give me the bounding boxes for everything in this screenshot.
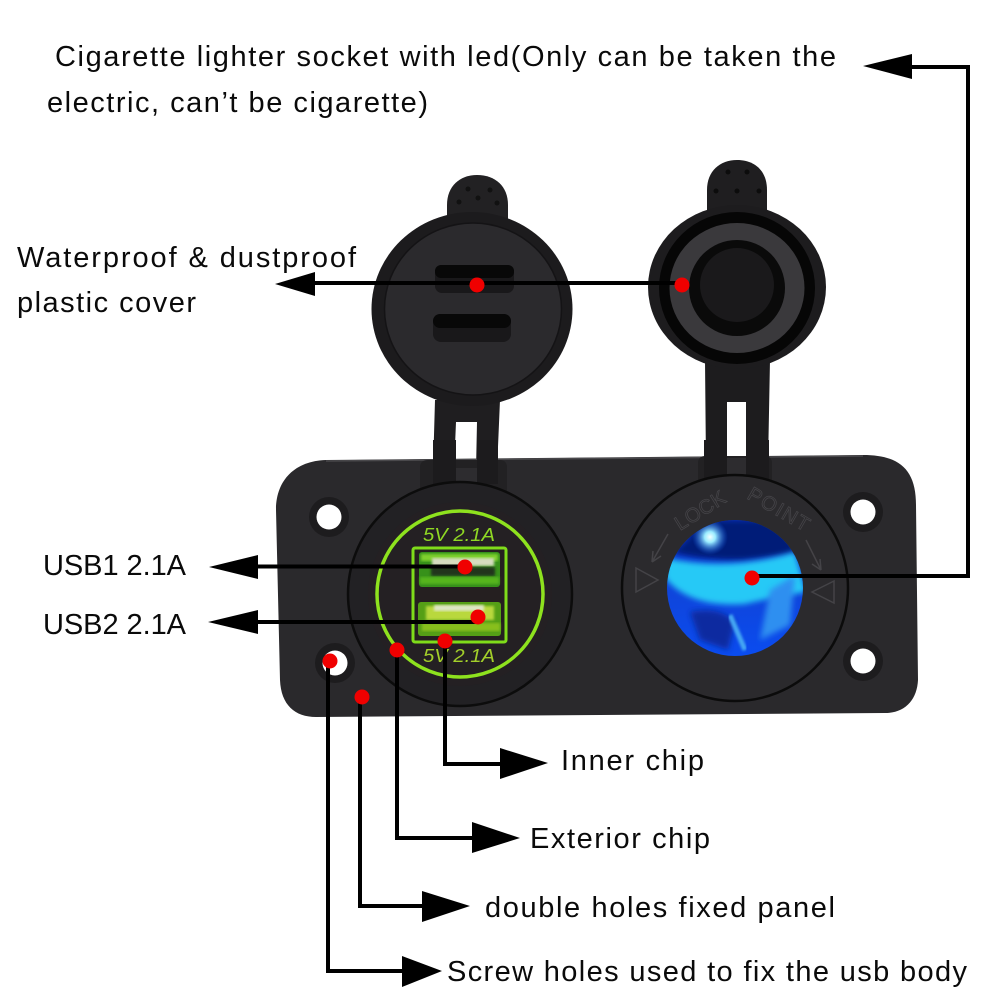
arrow: USB2 xyxy=(208,610,478,634)
arrow: screw holes xyxy=(328,661,442,987)
arrow: USB1 xyxy=(209,555,465,579)
callout: cigarette lighter socket label: Cigarette lighter socket with led(Only can be taken the xyxy=(55,41,836,73)
callout: USB1 label: USB1 2.1A xyxy=(43,550,187,582)
device: left USB protective cover xyxy=(372,175,572,470)
screw hole top right xyxy=(843,492,883,532)
screw hole bottom left xyxy=(315,643,355,683)
cover tab xyxy=(447,175,508,228)
USB port 2 xyxy=(418,602,501,636)
callout: inner chip label: Inner chip xyxy=(561,745,704,777)
USB port 1 xyxy=(419,552,500,587)
lit blue socket interior xyxy=(665,518,806,658)
callout: cigarette lighter socket label xyxy=(47,41,836,119)
embossed LOCK POINT text: LOCK xyxy=(671,487,731,535)
device: cigarette lighter socket xyxy=(622,475,848,701)
red marker dots xyxy=(322,278,760,704)
callout: waterproof cover label xyxy=(17,242,357,319)
arrow: cigarette socket callout xyxy=(752,54,968,576)
cover body xyxy=(372,212,572,406)
green LED ring xyxy=(377,511,543,677)
callout: double holes label: double holes fixed panel xyxy=(485,892,835,924)
cover strap xyxy=(433,400,500,470)
socket cover strap xyxy=(705,360,770,465)
USB port frame xyxy=(413,548,506,642)
device: USB charger socket xyxy=(348,482,572,706)
arrow: inner chip xyxy=(445,641,548,779)
embossed LOCK POINT text xyxy=(671,483,813,536)
callout: cigarette lighter socket label: electric, can’t be cigarette) xyxy=(47,87,428,119)
callout: USB2 label: USB2 2.1A xyxy=(43,609,187,641)
socket cover tab xyxy=(707,160,767,215)
screw hole top left xyxy=(309,497,349,537)
embossed LOCK POINT text: POINT xyxy=(744,483,813,536)
arrow: exterior chip xyxy=(397,650,520,853)
socket cover gray ring xyxy=(670,223,804,353)
strap anchors on panel xyxy=(420,460,507,496)
callout: waterproof cover label: Waterproof & dustproof xyxy=(17,242,357,274)
arrow: waterproof cover xyxy=(275,272,682,296)
screw hole bottom right xyxy=(843,641,883,681)
callout: exterior chip label: Exterior chip xyxy=(530,823,710,855)
voltage label top: 5V 2.1A xyxy=(423,525,495,545)
cover inner disc xyxy=(384,223,562,395)
voltage label bottom: 5V 2.1A xyxy=(423,646,495,666)
arrow: double holes xyxy=(360,697,470,922)
cover slots xyxy=(433,265,514,342)
device: mounting panel xyxy=(276,440,918,717)
socket cover body xyxy=(648,205,826,369)
callout: waterproof cover label: plastic cover xyxy=(17,287,196,319)
embossed triangles xyxy=(636,534,834,603)
device: right cigarette socket cover xyxy=(648,160,826,465)
callout: screw holes label: Screw holes used to fix the usb body xyxy=(447,956,968,988)
